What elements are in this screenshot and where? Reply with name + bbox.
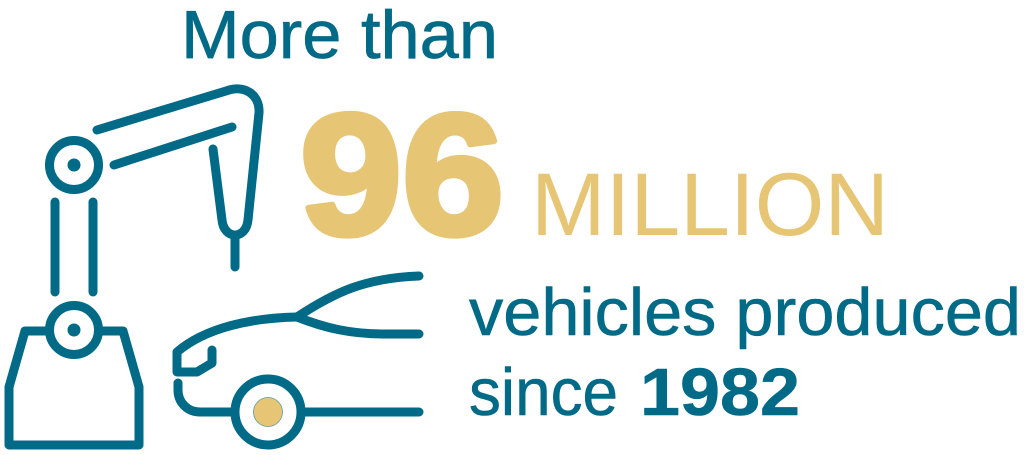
car bumper and sill — [178, 383, 235, 412]
car door line — [297, 317, 419, 334]
gripper stem — [230, 236, 240, 267]
text: since 1982: 1982 — [640, 355, 800, 430]
car rear sill — [303, 408, 419, 416]
car roof line — [297, 276, 419, 317]
robot base — [9, 331, 139, 445]
robot arm vertical struts — [55, 202, 93, 292]
big number: 96: 96 — [300, 79, 504, 271]
lower joint — [50, 306, 98, 354]
icon: car — [177, 276, 419, 445]
car wheel — [235, 379, 301, 445]
icon: robot arm — [9, 89, 259, 445]
car hood and headlight — [177, 317, 297, 372]
robot arm lower edge — [114, 127, 232, 165]
text: since 1982: since — [469, 355, 618, 430]
label: MILLION: MILLION — [531, 154, 889, 254]
text: vehicles produced: vehicles produced — [469, 275, 1021, 350]
robot arm upper segment and gripper — [97, 89, 259, 235]
upper joint — [50, 140, 98, 190]
